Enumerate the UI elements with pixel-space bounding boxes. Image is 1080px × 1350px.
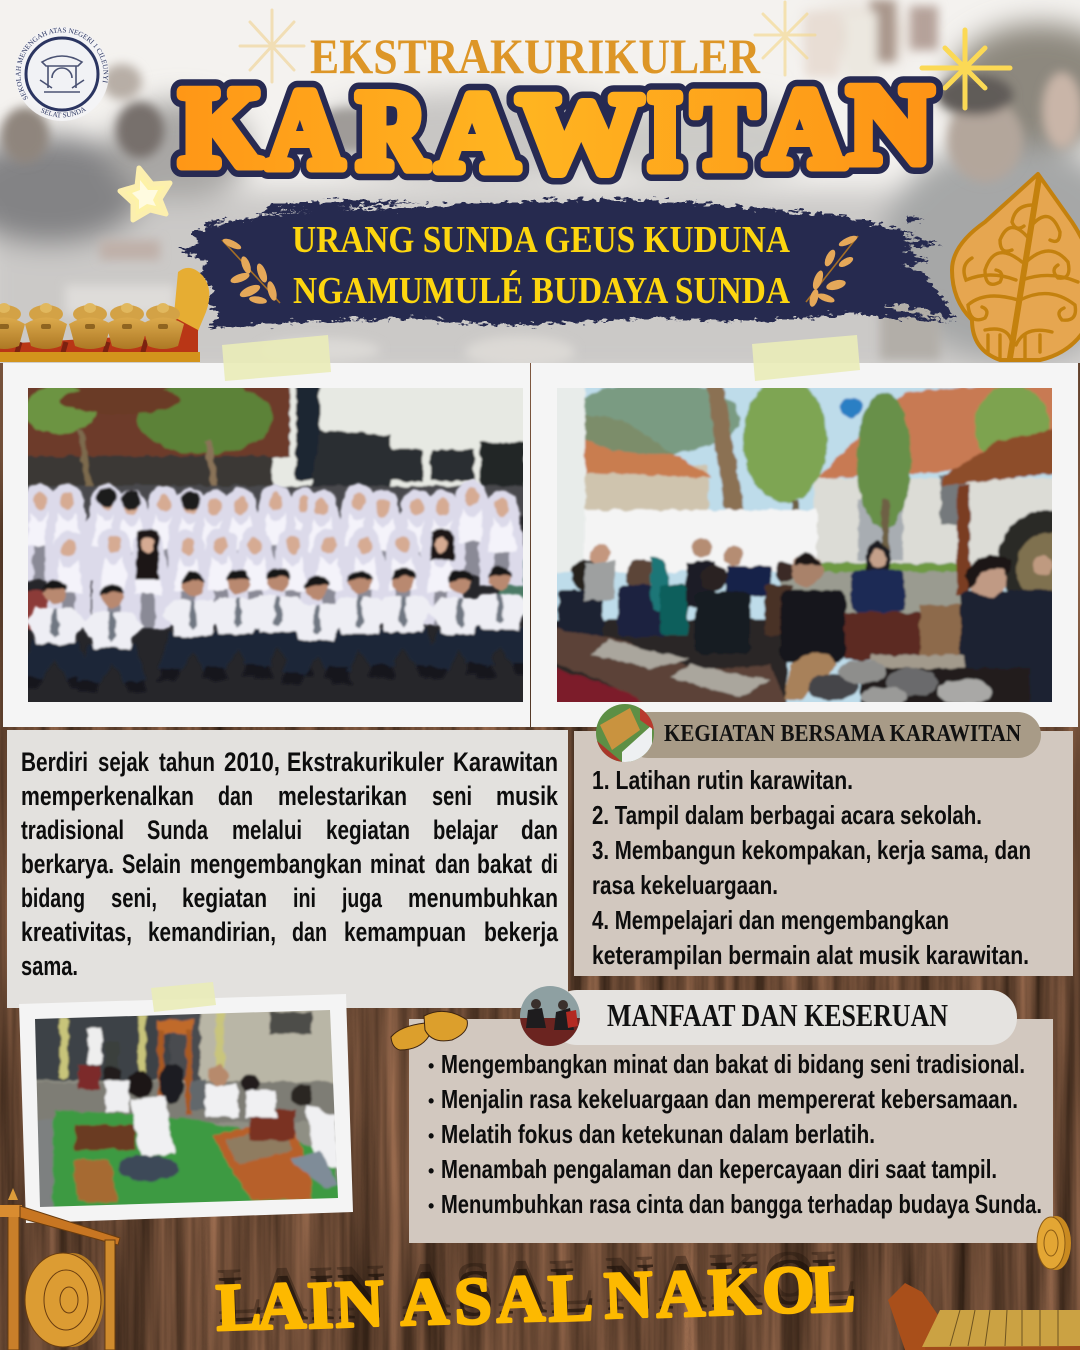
intro text: seni,	[111, 883, 157, 913]
intro text: seni	[432, 781, 472, 811]
title: karawitan: R	[357, 69, 428, 193]
title: karawitan: A	[267, 68, 343, 192]
manfaat list	[428, 1049, 1042, 1219]
intro text: sama.	[21, 951, 78, 981]
manfaat heading: MANFAAT DAN KESERUAN	[607, 997, 948, 1033]
manfaat list: •	[428, 1161, 434, 1181]
kegiatan list	[592, 765, 1031, 970]
title: karawitan: T	[692, 69, 758, 193]
title: karawitan: A	[437, 71, 518, 195]
slogan: lain asal nakol: LAIN ASAL NAKOL	[215, 1251, 856, 1345]
manfaat heading pill	[550, 990, 1017, 1045]
icon: kettle gongs	[391, 1011, 467, 1050]
intro text: minat	[370, 849, 425, 879]
intro text: tradisional	[21, 815, 124, 845]
slogan: lain asal nakol: LAIN ASAL NAKOL	[217, 1243, 858, 1337]
intro text: musik	[496, 781, 559, 811]
title: karawitan	[180, 63, 932, 196]
title: karawitan: A	[437, 71, 518, 195]
intro text: di	[541, 849, 558, 879]
intro text: ini	[293, 883, 316, 913]
title: karawitan: A	[765, 67, 845, 191]
intro text: Ekstrakurikuler	[287, 747, 444, 777]
intro text: mengembangkan	[190, 849, 362, 879]
icon: star	[120, 168, 170, 220]
icon: small gong	[1037, 1216, 1071, 1270]
intro text: berkarya.	[21, 849, 114, 879]
banner text: URANG SUNDA GEUS KUDUNA	[292, 219, 790, 261]
intro text: melalui	[232, 815, 302, 845]
title: karawitan: W	[518, 72, 642, 196]
title: ekstrakurikuler: EKSTRAKURIKULER	[310, 28, 761, 84]
intro text	[21, 747, 559, 981]
school logo: SELAT SUNDA	[40, 107, 86, 118]
icon: right leaf sprig	[806, 234, 859, 308]
manfaat list: •	[428, 1056, 434, 1076]
panel: intro paragraph	[7, 730, 568, 1008]
icon: left leaf sprig	[221, 237, 280, 305]
intro text: kemandirian,	[148, 917, 276, 947]
kegiatan list: 4. Mempelajari dan mengembangkan	[592, 905, 949, 935]
polaroid photo	[19, 994, 353, 1223]
banner text	[292, 219, 790, 312]
intro text: dan	[521, 815, 558, 845]
photo: gamelan performance	[557, 388, 1052, 702]
intro text: Karawitan	[453, 747, 558, 777]
manfaat list: Melatih fokus dan ketekunan dalam berlatih.	[441, 1119, 875, 1149]
intro text: tahun	[159, 747, 215, 777]
title: karawitan: K	[180, 66, 262, 190]
title: karawitan: K	[180, 66, 262, 190]
manfaat list: •	[428, 1126, 434, 1146]
title: karawitan: R	[357, 69, 428, 193]
icon: gunungan wayang	[952, 174, 1080, 360]
title: karawitan: I	[648, 70, 682, 194]
kegiatan list: rasa kekeluargaan.	[592, 870, 778, 900]
title: karawitan: W	[518, 72, 642, 196]
photo: group portrait	[18, 380, 535, 710]
kegiatan heading: KEGIATAN BERSAMA KARAWITAN	[664, 721, 1022, 747]
decorative fireworks and sparkles	[240, 2, 1010, 108]
intro text: dan	[218, 781, 253, 811]
slogan: lain asal nakol: LAIN ASAL NAKOL	[216, 1235, 857, 1329]
intro text: bekerja	[484, 917, 559, 947]
intro text: memperkenalkan	[21, 781, 194, 811]
kegiatan list: 2. Tampil dalam berbagai acara sekolah.	[592, 800, 982, 830]
photo card: left	[3, 363, 535, 727]
title: karawitan: A	[765, 67, 845, 191]
intro text: Berdiri	[21, 747, 88, 777]
intro text: juga	[341, 883, 383, 913]
school logo: SEKOLAH MENENGAH ATAS NEGERI 1 CILEUNYI	[16, 28, 108, 100]
panel: kegiatan	[574, 704, 1073, 976]
thumbnail: kegiatan	[596, 704, 654, 762]
intro text: kegiatan	[326, 815, 410, 845]
kegiatan list: 1. Latihan rutin karawitan.	[592, 765, 853, 795]
intro text: bidang	[21, 883, 85, 913]
intro text: melestarikan	[278, 781, 407, 811]
intro text: Selain	[122, 849, 181, 879]
intro text: dan	[292, 917, 327, 947]
banner text: NGAMUMULÉ BUDAYA SUNDA	[293, 270, 790, 312]
title: karawitan: I	[648, 70, 682, 194]
title: karawitan: N	[848, 63, 932, 187]
photo: students playing gamelan	[35, 1010, 338, 1207]
intro text: bakat	[477, 849, 532, 879]
hero faded photo background	[0, 0, 1080, 380]
tape: right	[752, 335, 860, 381]
intro text: dan	[435, 849, 470, 879]
intro text: kemampuan	[344, 917, 466, 947]
intro text: kreativitas,	[21, 917, 132, 947]
tape: polaroid	[151, 982, 216, 1012]
intro text: 2010,	[224, 747, 280, 777]
intro text: belajar	[433, 815, 498, 845]
icon: bonang gamelan	[0, 268, 209, 362]
title: karawitan: T	[692, 69, 758, 193]
title: karawitan: A	[267, 68, 343, 192]
icon: standing gong	[0, 1188, 120, 1350]
intro text: sejak	[98, 747, 150, 777]
manfaat list: •	[428, 1091, 434, 1111]
panel: manfaat	[409, 986, 1053, 1243]
photo card: right	[531, 363, 1080, 727]
intro text: Sunda	[147, 815, 209, 845]
title: karawitan: N	[848, 63, 932, 187]
intro text: menumbuhkan	[408, 883, 558, 913]
thumbnail: manfaat	[520, 986, 580, 1048]
manfaat list: •	[428, 1196, 434, 1216]
tape: left	[222, 335, 331, 381]
icon: saron	[888, 1283, 1080, 1350]
brush banner	[180, 199, 955, 328]
intro text: kegiatan	[182, 883, 267, 913]
kegiatan heading pill	[625, 712, 1041, 758]
